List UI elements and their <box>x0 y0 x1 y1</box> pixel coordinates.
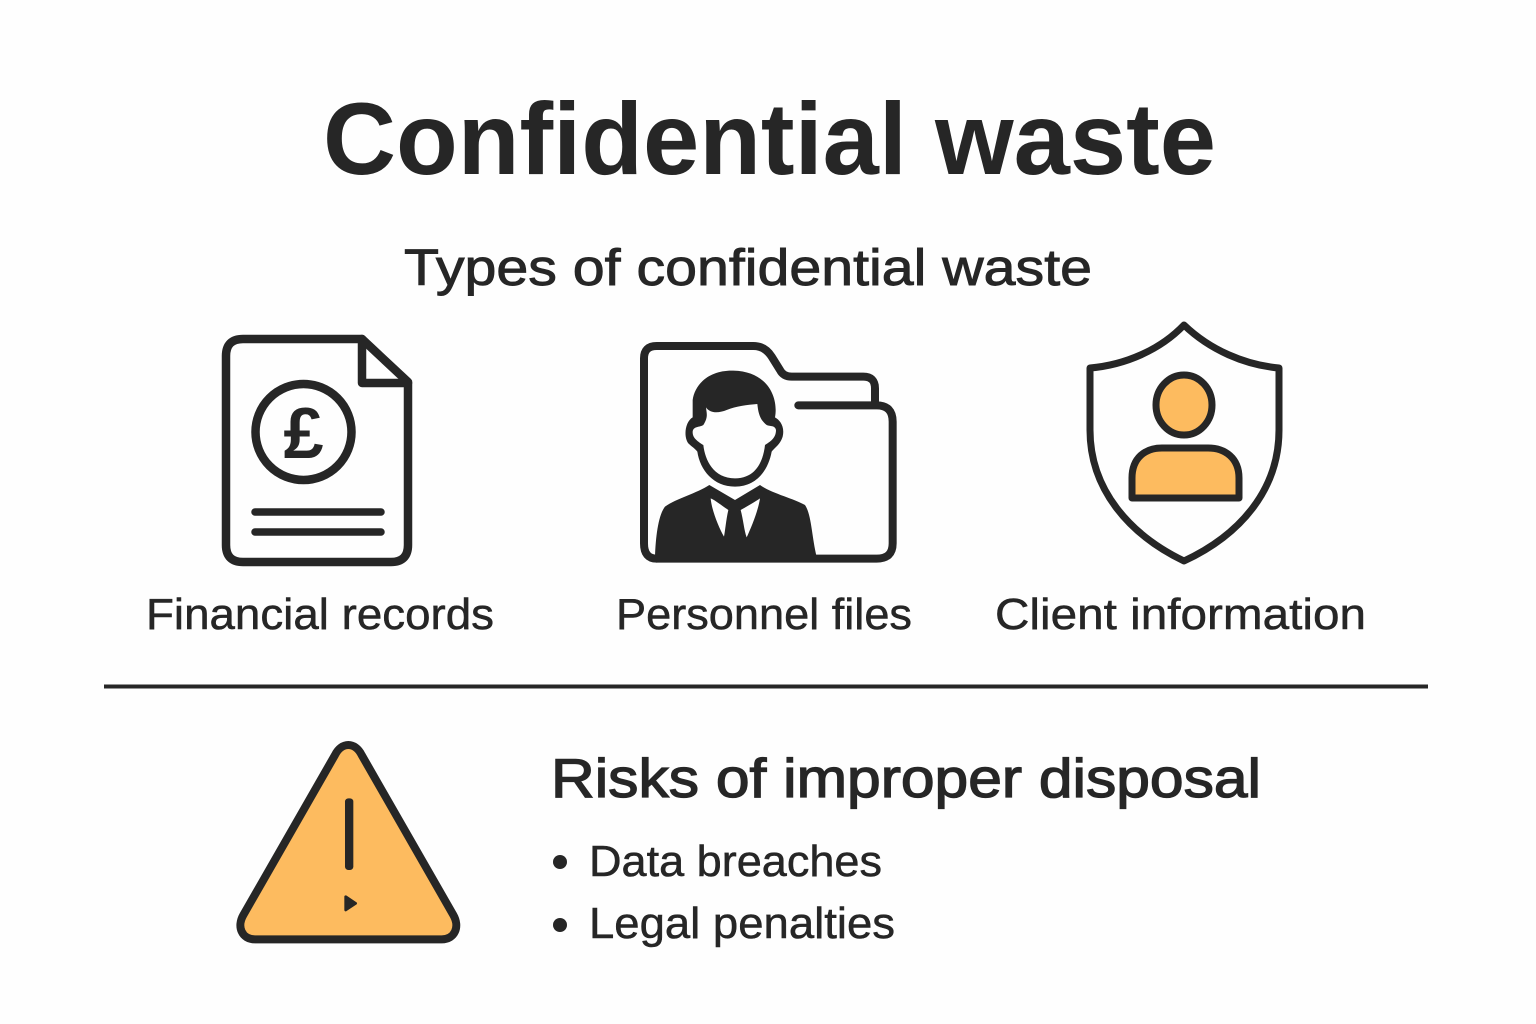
risk list <box>553 837 895 948</box>
bullet: data breaches: Data breaches <box>589 837 882 886</box>
icon: financial document with pound sign <box>226 339 408 562</box>
label: financial records: Financial records <box>146 590 494 639</box>
label: personnel files: Personnel files <box>616 590 912 639</box>
icon: financial document with pound sign: £ <box>283 394 324 474</box>
icon: warning triangle <box>240 745 456 939</box>
label: client information: Client information <box>995 590 1366 639</box>
section heading: risks: Risks of improper disposal <box>551 747 1261 809</box>
title: Confidential waste <box>323 82 1216 196</box>
icon: personnel folder with person <box>644 346 893 559</box>
section heading: types: Types of confidential waste <box>404 239 1092 296</box>
bullet: legal penalties: Legal penalties <box>589 899 895 948</box>
icon: shield with client <box>1090 325 1279 561</box>
